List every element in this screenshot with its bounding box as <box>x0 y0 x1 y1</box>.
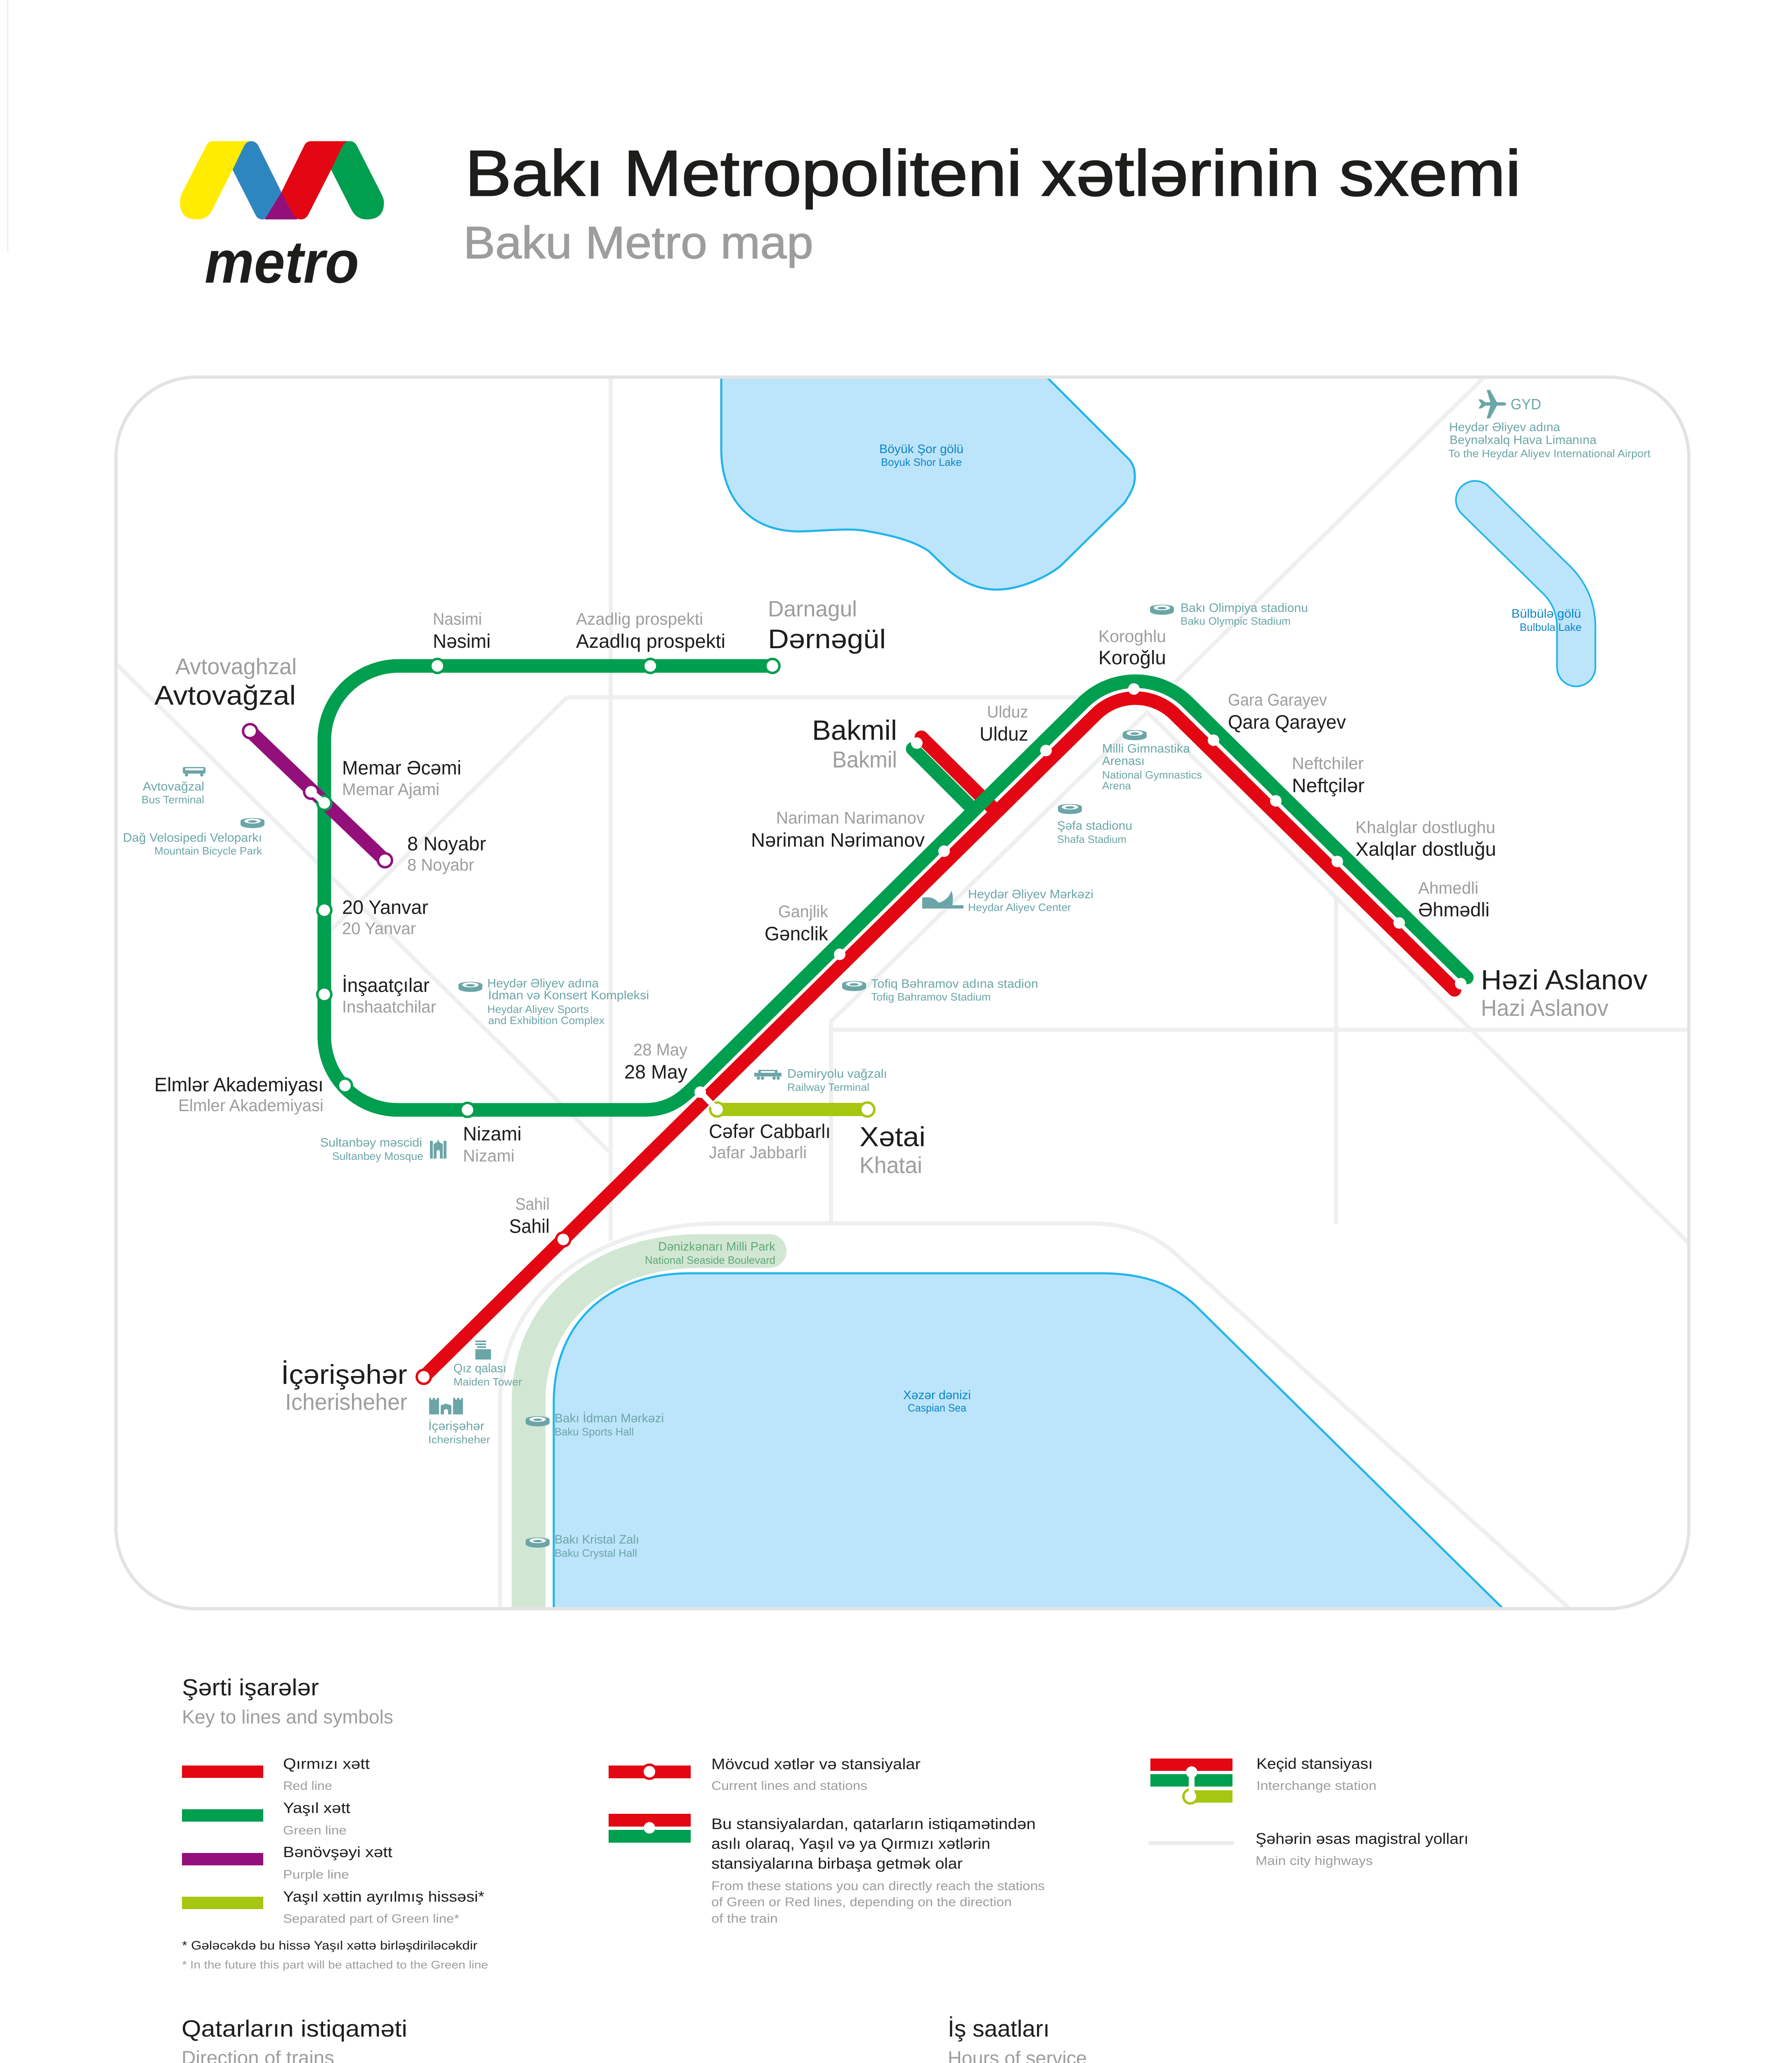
station: Ahmedli: Əhmədli <box>1418 899 1490 921</box>
legend: shared stations: of the train <box>711 1911 778 1926</box>
legend: green line <box>182 1799 350 1837</box>
station: Bakmil: Bakmil <box>832 746 897 772</box>
station: Nariman Narimanov: Nariman Narimanov <box>776 808 925 827</box>
legend: purple line <box>182 1843 392 1881</box>
poi: Sultanbey mosque: Sultanbey Mosque <box>332 1150 423 1162</box>
poi: bicycle park: Mountain Bicycle Park <box>154 845 262 857</box>
station: Ganjlik: Ganjlik <box>778 902 828 921</box>
panel: map <box>116 371 1692 1630</box>
logo wordmark: metro <box>205 229 359 295</box>
hours heading <box>948 2016 1087 2063</box>
station: Nasimi: Nasimi <box>433 609 482 628</box>
poi: Olympic stadium: Bakı Olimpiya stadionu <box>1181 601 1308 615</box>
poi: gymnastics arena: Arenası <box>1102 754 1145 768</box>
station: Ganjlik <box>765 902 828 944</box>
station: Avtovagzal: Avtovağzal <box>154 680 296 710</box>
legend: purple line: Purple line <box>283 1868 349 1881</box>
station: Nasimi: Nəsimi <box>433 630 491 652</box>
station: Koroglu: Koroghlu <box>1098 627 1166 646</box>
label: Bulbula lake: Bulbula Lake <box>1520 621 1582 633</box>
station: Azadliq prospekti <box>576 609 725 652</box>
label: Bulbula lake: Bülbülə gölü <box>1511 607 1581 621</box>
direction heading <box>182 2016 407 2063</box>
station rings <box>242 658 876 1385</box>
icon: stadium <box>526 1416 550 1426</box>
station: Hazi Aslanov: Həzi Aslanov <box>1481 964 1648 996</box>
poi: Tofig Bahramov stadium <box>842 977 1038 1003</box>
station: Qara Qarayev: Qara Qarayev <box>1228 711 1346 733</box>
poi: old city <box>428 1398 490 1446</box>
station: Darnagul <box>768 597 886 654</box>
station: Elmler Akademiyasi <box>154 1074 323 1115</box>
station: 28 May: 28 May <box>633 1040 687 1059</box>
legend footnote <box>182 1939 488 1971</box>
poi: railway terminal: Railway Terminal <box>787 1081 869 1093</box>
poi: Sultanbey mosque: Sultanbəy məscidi <box>320 1136 422 1150</box>
station: Elmler Akademiyasi: Elmlər Akademiyası <box>154 1074 323 1095</box>
icon: stadium <box>1058 804 1082 814</box>
legend: main highways <box>1148 1830 1469 1868</box>
poi: gymnastics arena: Arena <box>1102 779 1131 792</box>
icon: stadium <box>1150 605 1174 615</box>
station: Xalqlar dostlugu: Khalglar dostlughu <box>1355 818 1495 837</box>
icon: stadium <box>241 818 264 828</box>
station: 28 May <box>624 1040 687 1083</box>
poi: Baku Crystal Hall <box>526 1533 639 1559</box>
icon: stadium <box>458 982 482 992</box>
legend: shared stations: Bu stansiyalardan, qatarların istiqamətindən <box>711 1815 1036 1832</box>
station: Jafar Jabbarli <box>709 1120 831 1162</box>
lake: Boyuk Shor <box>721 373 1135 590</box>
label: Caspian Sea <box>903 1388 971 1414</box>
icon: tower <box>475 1341 491 1360</box>
station: Ganjlik: Gənclik <box>765 923 828 944</box>
poi: bicycle park: Dağ Velosipedi Veloparkı <box>123 831 262 845</box>
legend: interchange station <box>1150 1755 1376 1805</box>
poi: sports complex: Heydar Aliyev Sports <box>487 1003 589 1015</box>
legend: interchange station: Interchange station <box>1256 1778 1376 1793</box>
station: Sahil: Sahil <box>515 1194 550 1213</box>
poi: airport <box>1448 390 1651 460</box>
station: Inshaatchilar: Inshaatchilar <box>342 997 436 1016</box>
station: 8 Noyabr: 8 Noyabr <box>407 855 474 874</box>
legend: separated part: Yaşıl xəttin ayrılmış hissəsi* <box>283 1888 484 1905</box>
legend: separated part <box>182 1888 484 1926</box>
station: Sahil: Sahil <box>509 1215 550 1237</box>
poi: bus terminal: Bus Terminal <box>142 793 204 806</box>
legend: main highways: Main city highways <box>1256 1853 1373 1868</box>
station: 20 Yanvar <box>342 896 428 938</box>
poi: railway terminal <box>754 1067 887 1093</box>
icon: stadium <box>842 981 866 991</box>
city highways <box>117 371 1692 1613</box>
station: Nizami: Nizami <box>463 1123 522 1145</box>
icon: plane <box>1478 390 1506 418</box>
station: Koroglu <box>1098 627 1166 668</box>
poi: Baku Sports Hall: Bakı İdman Mərkəzi <box>555 1412 664 1425</box>
poi: Shafa stadium: Şəfa stadionu <box>1057 819 1132 833</box>
national seaside park strip <box>529 1251 770 1630</box>
poi: airport: To the Heydar Aliyev International Airport <box>1448 447 1651 460</box>
legend heading: Şərti işarələr <box>182 1674 319 1701</box>
station: Xalqlar dostlugu <box>1355 818 1496 860</box>
poi: bicycle park <box>123 818 264 857</box>
legend: shared stations: asılı olaraq, Yaşıl və ya Qırmızı xətlərin <box>711 1835 990 1852</box>
station: Xatai: Xətai <box>859 1121 926 1152</box>
icon: center building <box>922 891 963 909</box>
logo mark <box>180 141 384 220</box>
station labels <box>154 597 1648 1415</box>
panel: direction of trains <box>182 2016 782 2063</box>
station: Hazi Aslanov <box>1481 964 1648 1021</box>
purple line <box>250 731 385 860</box>
green line <box>324 666 1467 1110</box>
label: Boyuk Shor lake <box>879 442 963 468</box>
label: Boyuk Shor lake: Böyük Şor gölü <box>879 442 963 456</box>
station: Inshaatchilar <box>342 974 436 1016</box>
station: 8 Noyabr <box>407 833 486 874</box>
logo <box>180 141 384 295</box>
station: Qara Qarayev <box>1228 690 1346 733</box>
legend: current lines and stations <box>609 1756 921 1793</box>
station: 8 Noyabr: 8 Noyabr <box>407 833 486 854</box>
legend footnote: * In the future this part will be attached to the Green line <box>182 1959 488 1971</box>
station: Xatai: Khatai <box>859 1152 922 1178</box>
legend: current lines and stations: Mövcud xətlər və stansiyalar <box>711 1756 921 1773</box>
poi: Baku Crystal Hall: Bakı Kristal Zalı <box>555 1533 639 1546</box>
legend: current lines and stations: Current lines and stations <box>711 1778 867 1793</box>
poi: sports complex: and Exhibition Complex <box>488 1014 604 1027</box>
icon: castle <box>429 1398 463 1414</box>
label: seaside boulevard: National Seaside Boulevard <box>645 1254 775 1266</box>
poi: bus terminal: Avtovağzal <box>143 780 204 793</box>
panel: hours of service <box>948 2016 1087 2063</box>
red line <box>424 698 1454 1377</box>
poi: sports complex: İdman və Konsert Kompleksi <box>488 989 649 1002</box>
poi: Shafa stadium <box>1057 804 1132 845</box>
legend: red line <box>182 1755 370 1793</box>
station: Jafar Jabbarli: Jafar Jabbarli <box>709 1143 807 1162</box>
poi: airport: Heydər Əliyev adına <box>1449 420 1560 434</box>
station: Memar Ajami: Memar Əcəmi <box>342 757 461 779</box>
interchange links <box>311 792 717 1109</box>
hours heading: İş saatları <box>948 2016 1050 2042</box>
legend: shared stations: of Green or Red lines, depending on the direction <box>711 1895 1012 1909</box>
station: Sahil <box>509 1194 550 1237</box>
station: Nizami: Nizami <box>463 1146 515 1165</box>
legend heading <box>182 1674 393 1728</box>
legend: purple line: Bənövşəyi xətt <box>283 1843 392 1860</box>
label: Caspian Sea: Caspian Sea <box>908 1402 967 1414</box>
station: Ulduz: Ulduz <box>987 702 1028 721</box>
legend: separated part: Separated part of Green line* <box>283 1912 459 1926</box>
station: Qara Qarayev: Gara Garayev <box>1228 690 1327 709</box>
station: Ulduz <box>980 702 1028 745</box>
poi: Olympic stadium <box>1150 601 1308 627</box>
station: Neftchilar: Neftçilər <box>1292 774 1365 796</box>
legend: shared stations: stansiyalarına birbaşa getmək olar <box>711 1855 963 1872</box>
poi: Baku Crystal Hall: Baku Crystal Hall <box>555 1547 637 1559</box>
icon: mosque <box>430 1138 446 1159</box>
poi: Maiden Tower: Maiden Tower <box>453 1376 522 1388</box>
poi: Tofig Bahramov stadium: Tofiq Bəhramov adına stadion <box>871 977 1038 991</box>
poi: sports complex <box>458 977 649 1027</box>
station: Neftchilar <box>1292 754 1365 796</box>
station: Nariman Narimanov <box>751 808 925 851</box>
legend: interchange station: Keçid stansiyası <box>1256 1755 1373 1772</box>
legend: shared stations <box>609 1814 1045 1926</box>
poi: Shafa stadium: Shafa Stadium <box>1057 833 1126 845</box>
legend: shared stations: From these stations you can directly reach the stations <box>711 1879 1045 1893</box>
poi: Heydar Aliyev Center: Heydər Əliyev Mərkəzi <box>968 888 1093 901</box>
poi: gymnastics arena <box>1102 730 1202 792</box>
poi: Tofig Bahramov stadium: Tofig Bahramov Stadium <box>871 991 991 1003</box>
poi: Heydar Aliyev Center <box>922 888 1093 913</box>
station: Icherisheher: Icherisheher <box>285 1389 407 1415</box>
sea: Caspian <box>554 1273 1503 1613</box>
icon: stadium <box>1123 730 1147 740</box>
station: Ulduz: Ulduz <box>980 723 1028 745</box>
panel: legend <box>182 1674 1469 1971</box>
poi: Heydar Aliyev Center: Heydar Aliyev Center <box>968 901 1071 913</box>
station: Neftchilar: Neftchiler <box>1292 754 1364 773</box>
station: Icherisheher <box>281 1359 407 1415</box>
lime separated line <box>717 1103 867 1116</box>
station: Azadliq prospekti: Azadlıq prospekti <box>576 630 725 652</box>
legend: red line: Qırmızı xətt <box>283 1755 370 1772</box>
label: Caspian Sea: Xəzər dənizi <box>903 1388 971 1402</box>
station: Xatai <box>859 1121 926 1178</box>
station: Memar Ajami <box>342 757 461 799</box>
lake: Bulbula <box>1475 500 1576 667</box>
station: Elmler Akademiyasi: Elmler Akademiyasi <box>178 1096 323 1115</box>
label: Bulbula lake <box>1511 607 1582 633</box>
poi: railway terminal: Dəmiryolu vağzalı <box>787 1067 887 1081</box>
icon: train <box>754 1070 781 1080</box>
station: Ahmedli: Ahmedli <box>1418 878 1478 897</box>
station: Icherisheher: İçərişəhər <box>281 1359 407 1390</box>
crop marks <box>0 0 192 2063</box>
legend heading: Key to lines and symbols <box>182 1706 393 1728</box>
station: Avtovagzal: Avtovaghzal <box>175 654 297 679</box>
station: Jafar Jabbarli: Cəfər Cabbarlı <box>709 1120 831 1142</box>
map frame <box>116 377 1689 1609</box>
poi: Baku Sports Hall <box>526 1412 664 1438</box>
station: Koroglu: Koroğlu <box>1098 647 1166 668</box>
station: Azadliq prospekti: Azadlig prospekti <box>576 609 703 628</box>
icon: stadium <box>526 1537 550 1548</box>
station: 20 Yanvar: 20 Yanvar <box>342 896 428 918</box>
legend footnote: * Gələcəkdə bu hissə Yaşıl xəttə birləşdiriləcəkdir <box>182 1939 477 1952</box>
station: Inshaatchilar: İnşaatçılar <box>342 974 430 996</box>
station: Darnagul: Darnagul <box>768 597 857 621</box>
station dots <box>244 660 1466 1383</box>
station: Nariman Narimanov: Nəriman Nərimanov <box>751 829 925 851</box>
legend: main highways: Şəhərin əsas magistral yolları <box>1256 1830 1469 1847</box>
poi: sports complex: Heydər Əliyev adına <box>487 977 599 990</box>
label: Boyuk Shor lake: Boyuk Shor Lake <box>881 456 962 468</box>
poi: gymnastics arena: Milli Gimnastika <box>1102 742 1190 755</box>
station: Hazi Aslanov: Hazi Aslanov <box>1481 995 1608 1021</box>
station: Bakmil: Bakmil <box>812 715 897 746</box>
station: Avtovagzal <box>154 654 297 710</box>
poi: Maiden Tower: Qız qalası <box>453 1362 506 1375</box>
poi: gymnastics arena: National Gymnastics <box>1102 769 1202 781</box>
poi: old city: Icherisheher <box>428 1433 490 1446</box>
label: seaside boulevard <box>645 1240 776 1266</box>
poi: Olympic stadium: Baku Olympic Stadium <box>1181 615 1291 627</box>
poi: bus terminal <box>142 767 205 806</box>
station: Nasimi <box>433 609 491 652</box>
title: Bakı Metropoliteni xətlərinin sxemi <box>465 137 1521 210</box>
subtitle: Baku Metro map <box>463 217 813 268</box>
icon: bus <box>183 767 205 777</box>
poi: Baku Sports Hall: Baku Sports Hall <box>555 1426 634 1438</box>
station: Memar Ajami: Memar Ajami <box>342 780 439 799</box>
station: Darnagul: Dərnəgül <box>768 624 886 654</box>
direction heading: Qatarların istiqaməti <box>182 2016 407 2042</box>
poi: airport: GYD <box>1511 396 1541 413</box>
poi: Maiden Tower <box>453 1341 522 1388</box>
poi: old city: İçərişəhər <box>428 1419 484 1433</box>
station: Bakmil <box>812 715 897 772</box>
water labels <box>645 442 1582 1414</box>
legend: green line: Green line <box>283 1824 347 1837</box>
legend: green line: Yaşıl xətt <box>283 1799 350 1816</box>
points of interest <box>123 390 1651 1559</box>
station: 20 Yanvar: 20 Yanvar <box>342 919 416 938</box>
label: seaside boulevard: Dənizkənarı Milli Park <box>658 1240 776 1253</box>
poi: Sultanbey mosque <box>320 1136 446 1162</box>
station: Xalqlar dostlugu: Xalqlar dostluğu <box>1355 838 1496 860</box>
station: Nizami <box>463 1123 522 1165</box>
poi: airport: Beynəlxalq Hava Limanına <box>1450 433 1596 447</box>
legend: red line: Red line <box>283 1779 332 1793</box>
station: 28 May: 28 May <box>624 1061 687 1083</box>
station: Ahmedli <box>1418 878 1490 921</box>
